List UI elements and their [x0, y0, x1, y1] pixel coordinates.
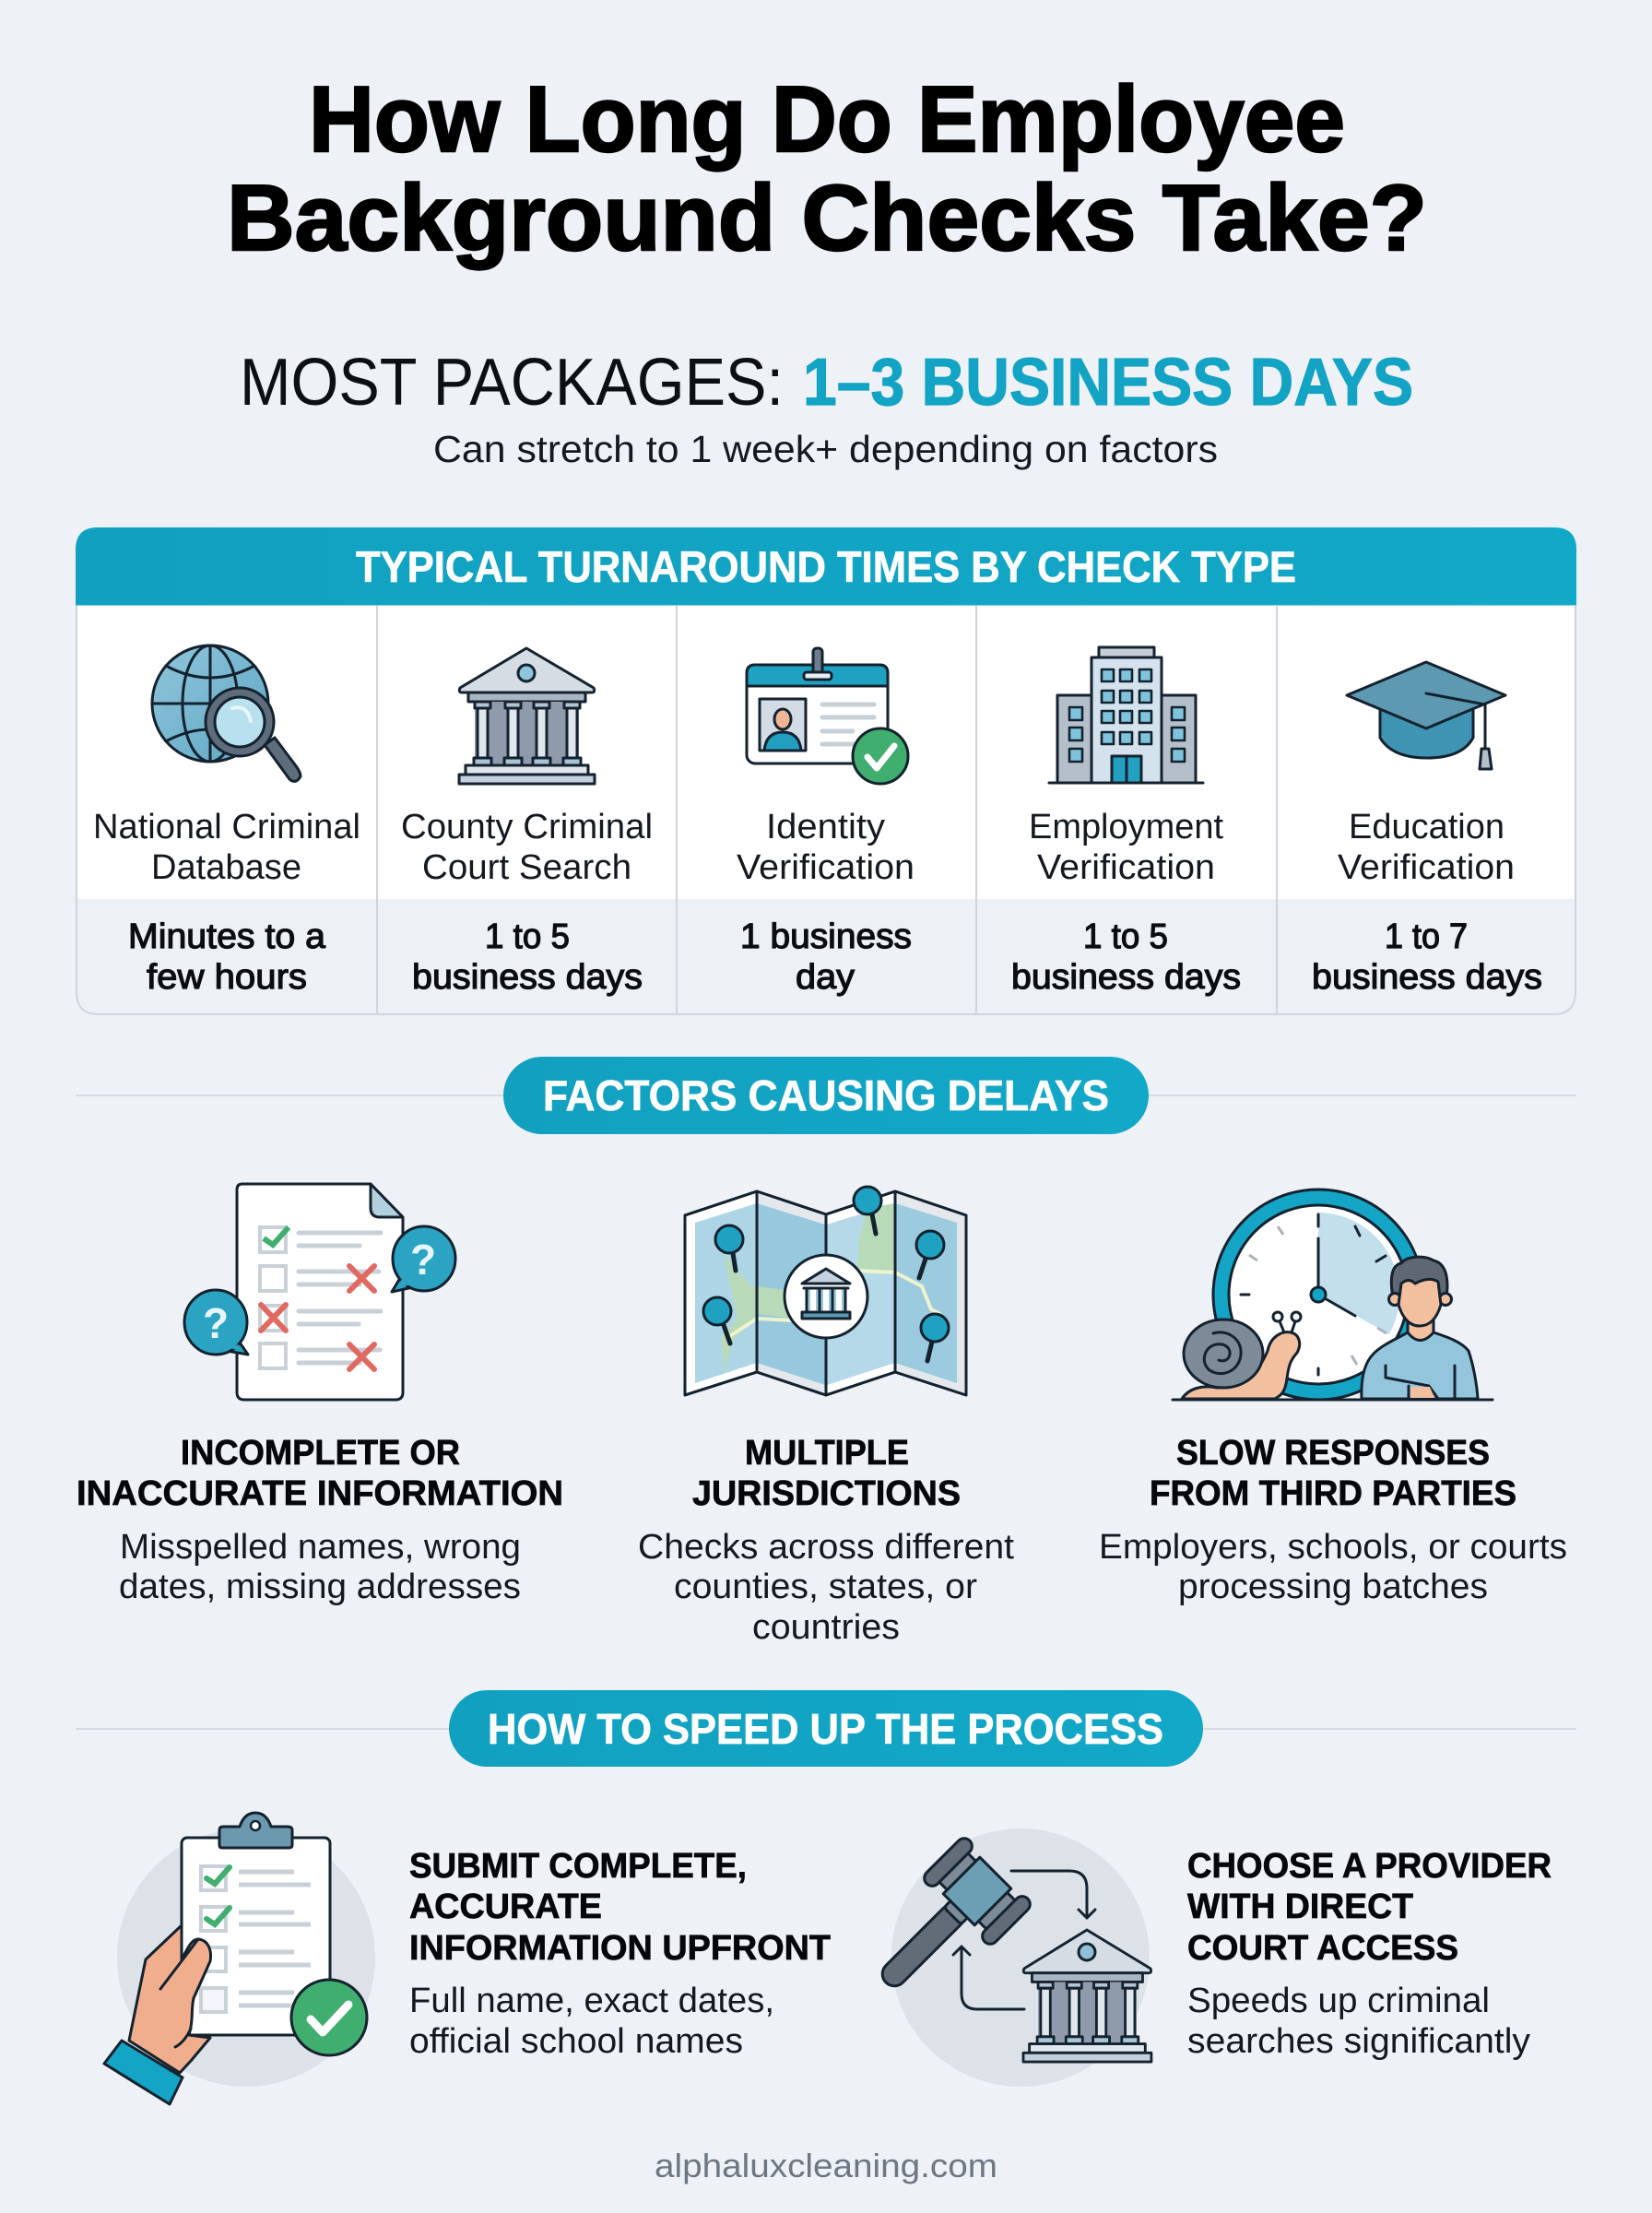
heading: INCOMPLETE OR	[181, 1434, 460, 1473]
label: Verification	[1037, 848, 1215, 887]
headline: most packages: MOST PACKAGES:	[240, 346, 784, 420]
heading: SLOW RESPONSES	[1176, 1434, 1490, 1473]
description: Misspelled names, wrong	[120, 1528, 521, 1567]
time: day	[796, 958, 855, 997]
description: searches significantly	[1187, 2022, 1530, 2061]
factor: multiple jurisdictions	[638, 1187, 1014, 1647]
column: education verification	[1312, 662, 1542, 997]
icon: document with errors: ?	[203, 1299, 229, 1347]
time: business days	[412, 958, 643, 997]
description: dates, missing addresses	[119, 1568, 521, 1606]
description	[409, 1982, 774, 2061]
heading: JURISDICTIONS	[692, 1474, 961, 1513]
section heading: how to speed up the process: HOW TO SPEED UP THE PROCESS	[488, 1705, 1163, 1753]
label: County Criminal	[401, 808, 653, 846]
footer url: alphaluxcleaning.com	[655, 2147, 997, 2184]
description	[638, 1528, 1014, 1647]
time: 1 to 5	[1083, 917, 1168, 956]
heading	[77, 1434, 563, 1513]
icon: clock, snail and person	[1173, 1189, 1493, 1400]
label: Verification	[1338, 848, 1515, 887]
label	[401, 808, 653, 887]
heading: MULTIPLE	[745, 1434, 909, 1473]
description: countries	[752, 1608, 900, 1647]
headline: most packages: 1–3 BUSINESS DAYS	[803, 346, 1413, 420]
tip: choose a provider with direct court access	[852, 1828, 1552, 2087]
time	[1312, 917, 1542, 997]
time	[128, 917, 326, 997]
heading	[692, 1434, 961, 1513]
heading	[409, 1847, 831, 1968]
icon: id card	[747, 648, 908, 784]
column: county criminal court search	[401, 648, 653, 997]
subheading: Can stretch to 1 week+ depending on factors	[433, 428, 1218, 470]
description: Speeds up criminal	[1187, 1982, 1490, 2020]
title	[227, 68, 1427, 270]
description: processing batches	[1178, 1568, 1488, 1606]
time	[740, 917, 912, 997]
icon: courthouse	[459, 648, 595, 784]
column: employment verification	[1011, 647, 1241, 997]
section heading: factors causing delays	[503, 1057, 1149, 1134]
heading: COURT ACCESS	[1187, 1929, 1458, 1968]
icon: office building	[1049, 647, 1203, 783]
description: Checks across different	[638, 1528, 1014, 1567]
icon: globe with magnifier	[152, 645, 301, 781]
panel: typical turnaround times	[76, 527, 1576, 1014]
label: Verification	[737, 848, 914, 887]
heading	[1187, 1847, 1552, 1968]
time: few hours	[147, 958, 307, 997]
heading: CHOOSE A PROVIDER	[1187, 1847, 1552, 1886]
description: Employers, schools, or courts	[1099, 1528, 1567, 1567]
label	[93, 808, 360, 887]
tip: submit complete information	[104, 1813, 831, 2104]
description: counties, states, or	[674, 1568, 977, 1606]
label	[1338, 808, 1515, 887]
heading: SUBMIT COMPLETE,	[409, 1847, 747, 1886]
description	[1099, 1528, 1567, 1606]
time: 1 to 5	[485, 917, 570, 956]
label	[1029, 808, 1223, 887]
heading	[1150, 1434, 1516, 1513]
heading: FROM THIRD PARTIES	[1150, 1474, 1516, 1513]
icon: gavel and courthouse	[852, 1828, 1151, 2087]
icon: graduation cap	[1347, 662, 1505, 769]
column: identity verification	[737, 648, 914, 997]
label: Database	[151, 848, 301, 887]
time: business days	[1011, 958, 1241, 997]
label: Education	[1349, 808, 1504, 846]
label	[737, 808, 914, 887]
title: Background Checks Take?	[227, 167, 1427, 270]
table header: TYPICAL TURNAROUND TIMES BY CHECK TYPE	[356, 542, 1296, 591]
section heading: how to speed up the process	[449, 1690, 1203, 1767]
time: business days	[1312, 958, 1542, 997]
heading: INFORMATION UPFRONT	[409, 1929, 831, 1968]
heading: INACCURATE INFORMATION	[77, 1474, 563, 1513]
time	[1011, 917, 1241, 997]
factor: slow responses	[1099, 1189, 1567, 1606]
label: Identity	[766, 808, 885, 846]
time: Minutes to a	[128, 917, 326, 956]
factor: incomplete information	[77, 1184, 563, 1606]
icon: document with errors	[184, 1184, 455, 1400]
description: Full name, exact dates,	[409, 1982, 774, 2020]
title: How Long Do Employee	[309, 68, 1345, 172]
heading: ACCURATE	[409, 1888, 602, 1926]
time	[412, 917, 643, 997]
description	[1187, 1982, 1530, 2061]
description	[119, 1528, 521, 1606]
icon: document with errors: ?	[410, 1236, 436, 1284]
time: 1 to 7	[1385, 917, 1468, 956]
icon: folded map with pins	[685, 1187, 966, 1395]
section heading: factors causing delays: FACTORS CAUSING DELAYS	[543, 1071, 1109, 1119]
label: Employment	[1029, 808, 1223, 846]
column: national criminal database	[93, 645, 360, 997]
label: National Criminal	[93, 808, 360, 846]
label: Court Search	[422, 848, 631, 887]
icon: hand holding clipboard	[104, 1813, 375, 2104]
headline: most packages	[240, 346, 1413, 420]
heading: WITH DIRECT	[1187, 1888, 1413, 1926]
time: 1 business	[740, 917, 912, 956]
description: official school names	[409, 2022, 743, 2061]
